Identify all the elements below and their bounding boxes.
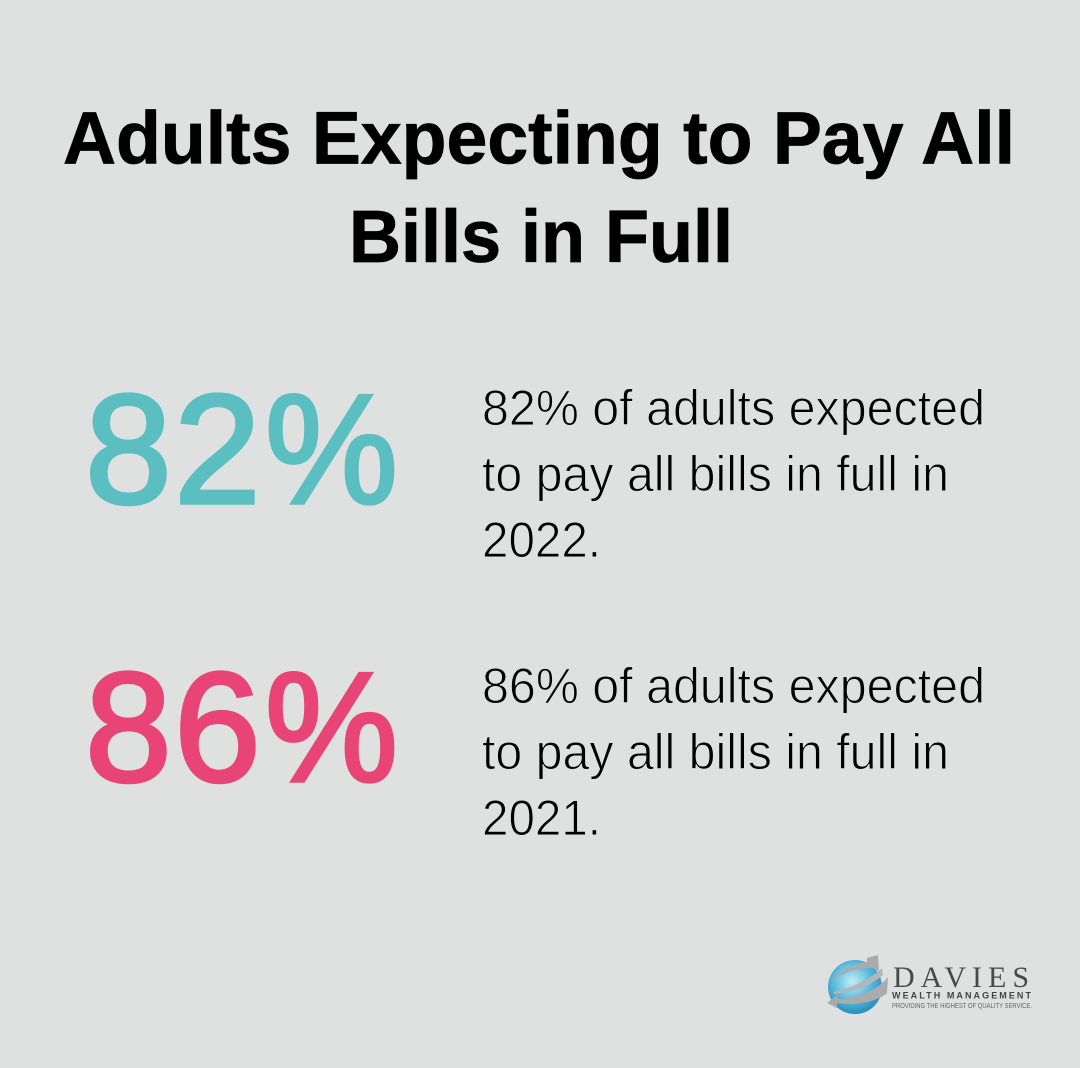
- big number 86%: [85, 641, 398, 815]
- title: Adults Expecting to Pay All: [63, 96, 1015, 180]
- big number 82%: %: [265, 363, 398, 537]
- description 2022: 82% of adults expected: [482, 380, 985, 436]
- stat: 82%: [85, 363, 985, 568]
- logo: Davies Wealth Management: [827, 955, 1032, 1014]
- big number 82%: [85, 363, 398, 537]
- big number 82%: 8: [85, 363, 172, 537]
- title: [63, 96, 1015, 278]
- description 2021: 86% of adults expected: [482, 658, 985, 714]
- wordmark: DAVIES: [893, 961, 1029, 994]
- description 2022: [482, 380, 985, 568]
- big number 86%: 6: [174, 641, 261, 815]
- description 2022: 2022.: [482, 512, 601, 568]
- big number 86%: 8: [85, 641, 172, 815]
- title: Bills in Full: [349, 195, 733, 278]
- big number 86%: %: [265, 641, 398, 815]
- tagline: PROVIDING THE HIGHEST OF QUALITY SERVICE.: [892, 1003, 1032, 1010]
- description 2021: 2021.: [482, 790, 601, 846]
- description 2022: to pay all bills in full in: [482, 446, 949, 502]
- description 2021: to pay all bills in full in: [482, 724, 949, 780]
- icon: globe with arrows: [827, 955, 888, 1014]
- stat: 86%: [85, 641, 985, 846]
- description 2021: [482, 658, 985, 846]
- big number 82%: 2: [174, 363, 261, 537]
- wordmark line: wealth management: WEALTH MANAGEMENT: [892, 990, 1032, 1000]
